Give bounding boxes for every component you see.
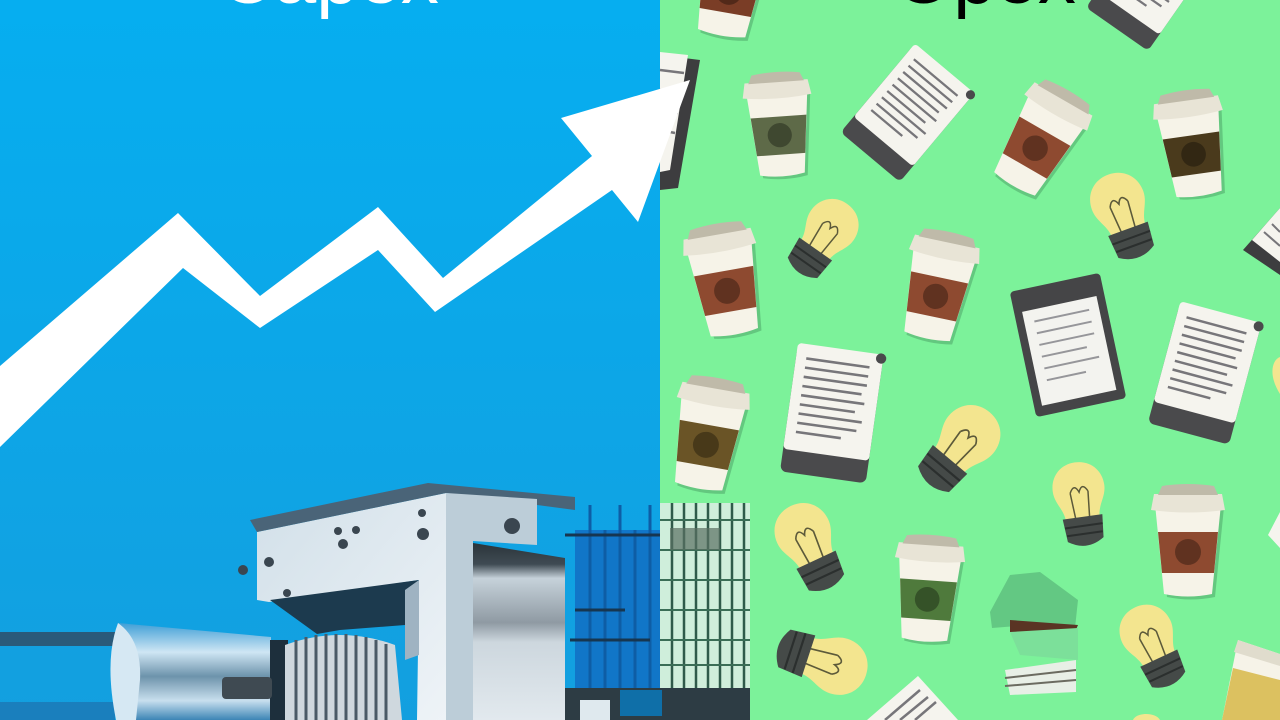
building grid <box>660 503 750 690</box>
machine lower side <box>473 543 565 720</box>
machine cylinder <box>118 623 271 720</box>
machine ribbed coil <box>285 634 402 720</box>
machine shaft <box>0 632 118 646</box>
icon: light bulb <box>778 189 869 288</box>
icon: coffee cup olive <box>741 70 817 182</box>
icon: document <box>780 342 887 484</box>
icon: light bulb <box>1111 596 1195 696</box>
machine lid <box>250 483 575 532</box>
icon: partial bulb bottom <box>1133 714 1160 720</box>
icon: light bulb <box>1049 459 1112 549</box>
icon: light bulb <box>907 394 1012 503</box>
icon: partial document bottom <box>867 676 958 720</box>
icon: partial document at divider <box>660 52 700 190</box>
icon: document top <box>1086 0 1216 52</box>
icon: coffee cup olive <box>661 371 754 498</box>
machine flange <box>110 623 140 720</box>
icon: document <box>841 43 977 184</box>
machine opening frame <box>405 580 419 660</box>
icon: coffee cup dark <box>1150 85 1235 204</box>
machine bolts <box>238 509 520 597</box>
machine dark base band <box>565 688 750 720</box>
icon: light bulb <box>769 619 875 702</box>
arrow: rising trend <box>0 80 690 447</box>
icon: partial document right edge lower <box>1268 512 1280 548</box>
icon: coffee cup <box>980 72 1100 207</box>
icon: torn green paper <box>990 572 1078 695</box>
icon: light bulb <box>765 494 855 600</box>
pattern: coffee cups, light bulbs and documents <box>660 0 1280 720</box>
icon: partial document right edge <box>1243 208 1280 275</box>
panel: opex background <box>660 0 1280 720</box>
machine dark ring <box>270 640 288 720</box>
icon: coffee cup <box>679 217 772 344</box>
machine hub <box>222 677 272 699</box>
icon: coffee cup <box>1151 484 1225 600</box>
machine opening <box>270 580 419 634</box>
icon: partial bulb right edge <box>1272 357 1280 394</box>
machine side face <box>446 493 537 720</box>
machine base pipe <box>0 702 115 720</box>
panel: capex background <box>0 0 660 720</box>
icon: document <box>1148 300 1265 445</box>
icon: coffee cup <box>891 224 984 349</box>
machine front face <box>257 493 446 720</box>
machine blue scaffold <box>565 505 660 690</box>
icon: coffee cup <box>684 0 777 45</box>
icon: partial coffee cup corner <box>1222 640 1280 720</box>
icon: coffee cup green <box>889 532 967 647</box>
icon: light bulb <box>1083 165 1164 267</box>
illustration: industrial machine <box>0 483 750 720</box>
icon: tablet <box>1010 273 1126 417</box>
